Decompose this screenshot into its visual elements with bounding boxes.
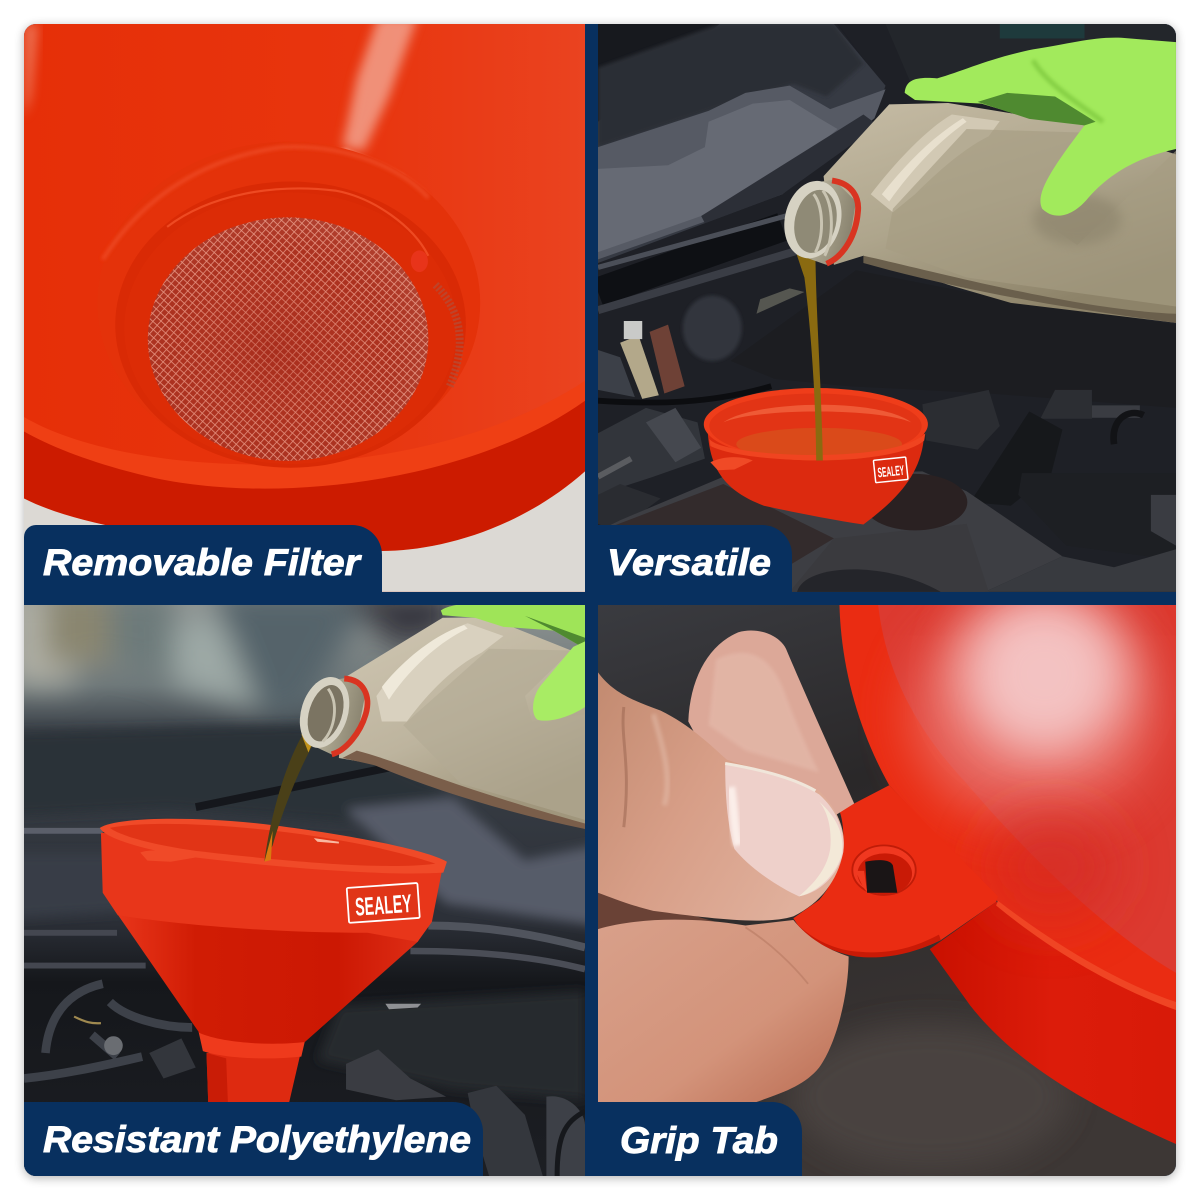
label: Resistant Polyethylene bbox=[24, 1102, 483, 1176]
highlight streak bbox=[342, 17, 418, 151]
engine right parts bbox=[922, 390, 1000, 450]
engine left parts bbox=[683, 296, 742, 361]
raised ring bbox=[320, 147, 480, 410]
funnel bbox=[793, 590, 1176, 1144]
inner bowl bbox=[878, 605, 1176, 973]
label: Removable Filter: Removable Filter bbox=[43, 542, 363, 583]
label: Removable Filter bbox=[24, 525, 382, 592]
blurred hood bbox=[10, 725, 596, 925]
icon: mesh filter bbox=[148, 217, 428, 461]
bottle neck bbox=[300, 676, 370, 758]
glove bbox=[905, 38, 1176, 216]
rim lip bbox=[996, 901, 1176, 1010]
thumbnail bbox=[725, 763, 844, 896]
flange bbox=[839, 605, 1176, 1006]
label: Versatile bbox=[585, 525, 792, 592]
label: Versatile: Versatile bbox=[607, 542, 771, 583]
funnel rim bbox=[24, 401, 585, 551]
bottle bbox=[824, 103, 1176, 323]
red funnel bbox=[100, 819, 447, 1104]
engine cover bbox=[598, 24, 720, 122]
panel: resistant polyethylene bbox=[10, 590, 596, 1176]
bottle neck bbox=[777, 176, 858, 265]
logo: SEALEY bbox=[354, 890, 413, 922]
outer cone bbox=[930, 902, 1176, 1144]
label: Resistant Polyethylene: Resistant Polyethylene bbox=[43, 1119, 471, 1160]
logo: SEALEY bbox=[877, 462, 905, 480]
hand bbox=[598, 631, 854, 1103]
bottle bbox=[339, 618, 585, 829]
label: Grip Tab: Grip Tab bbox=[620, 1120, 778, 1161]
oil stream bbox=[796, 252, 823, 460]
panel: removable filter bbox=[24, 17, 585, 592]
finger gap shadow bbox=[598, 892, 714, 929]
dark engine fabric bbox=[1176, 325, 1177, 408]
oil stream bbox=[264, 737, 314, 862]
thumb bbox=[598, 672, 844, 921]
index finger bbox=[688, 631, 854, 816]
label: Grip Tab bbox=[585, 1102, 802, 1176]
engine below bbox=[317, 991, 585, 1100]
logo bbox=[347, 883, 420, 923]
red funnel bbox=[704, 388, 928, 525]
lower finger bbox=[598, 920, 849, 1103]
panel: grip tab bbox=[598, 590, 1176, 1176]
blurred windscreen bbox=[10, 590, 453, 714]
glove bbox=[441, 601, 585, 721]
tab hole bbox=[852, 845, 916, 895]
engine cover bottom bbox=[598, 471, 1062, 592]
hood channel bbox=[598, 227, 782, 292]
tabletop bbox=[24, 471, 585, 592]
panel: versatile bbox=[598, 24, 1176, 592]
logo bbox=[873, 457, 908, 483]
grip tab bbox=[793, 785, 998, 957]
